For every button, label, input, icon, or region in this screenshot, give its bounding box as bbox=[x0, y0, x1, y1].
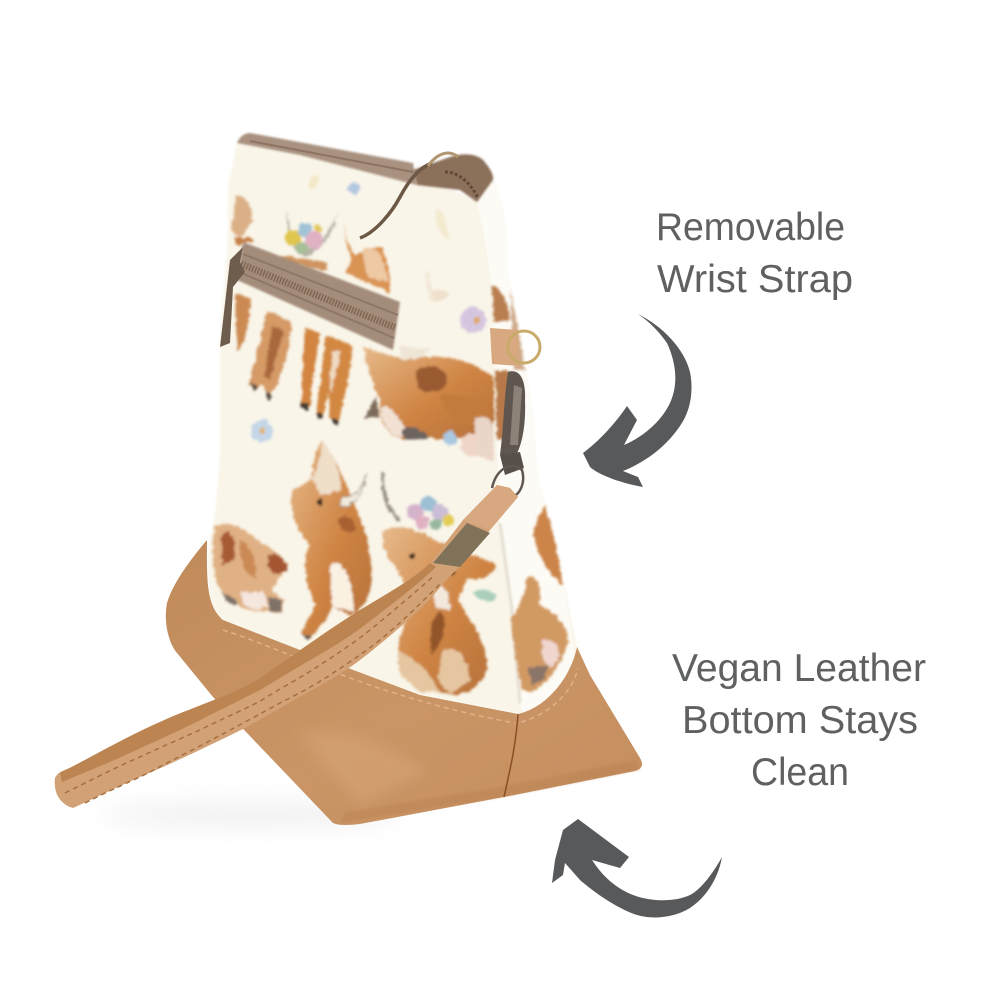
side gusset fold bbox=[477, 180, 577, 712]
cow: gusset bottom bbox=[511, 576, 568, 693]
strap metal tip bbox=[433, 523, 490, 567]
cow: top flower crown bbox=[287, 210, 338, 257]
cow: standing head top bbox=[344, 220, 390, 293]
cow: lying left bbox=[213, 524, 287, 613]
heading: Vegan Leather Bottom Stays Clean: Clean bbox=[751, 751, 849, 794]
heading: Vegan Leather Bottom Stays Clean: Bottom Stays bbox=[682, 699, 918, 742]
cow: sleeping head bbox=[363, 347, 494, 440]
zipper end knob bbox=[413, 154, 493, 202]
heading: Vegan Leather Bottom Stays Clean: Vegan Leather bbox=[672, 647, 926, 690]
arrow: pointing to leather bottom bbox=[552, 819, 722, 917]
cow: with flower crown bbox=[383, 472, 400, 520]
heading: Removable Wrist Strap bbox=[656, 206, 853, 301]
heading: Removable Wrist Strap: Wrist Strap bbox=[657, 258, 853, 301]
cow: gusset upper bbox=[492, 285, 510, 322]
small flowers bbox=[460, 307, 486, 333]
bag fabric body bbox=[208, 143, 577, 714]
leather bottom shade bbox=[340, 760, 640, 823]
fabric print: cow illustrations bbox=[213, 175, 568, 695]
soft shadow bbox=[100, 803, 400, 827]
stitching line bbox=[223, 630, 515, 723]
heading: Vegan Leather Bottom Stays Clean bbox=[672, 647, 926, 794]
cow: sitting looking up bbox=[291, 440, 371, 640]
pocket zipper pull bbox=[220, 247, 245, 347]
top zipper pull bbox=[360, 163, 432, 238]
seam bbox=[504, 714, 518, 797]
arrow: pointing to strap bbox=[583, 314, 692, 487]
legs group 2 bbox=[301, 328, 320, 407]
wrist strap bbox=[55, 485, 518, 808]
product photo: wristlet bag bbox=[55, 133, 642, 825]
leather highlight bbox=[300, 732, 430, 805]
pocket zipper bbox=[237, 242, 400, 350]
strap upper loop bbox=[463, 485, 518, 530]
top zipper bbox=[237, 133, 417, 185]
cow: gusset top strip bbox=[533, 505, 563, 585]
flowers at belly bbox=[461, 433, 485, 457]
strap clip hardware bbox=[490, 328, 540, 495]
strap upper edge bbox=[60, 563, 436, 782]
legs group 1 bbox=[235, 293, 252, 352]
heading: Removable Wrist Strap: Removable bbox=[656, 206, 845, 249]
cow: left strip bbox=[231, 195, 252, 238]
leather base bbox=[166, 540, 642, 825]
